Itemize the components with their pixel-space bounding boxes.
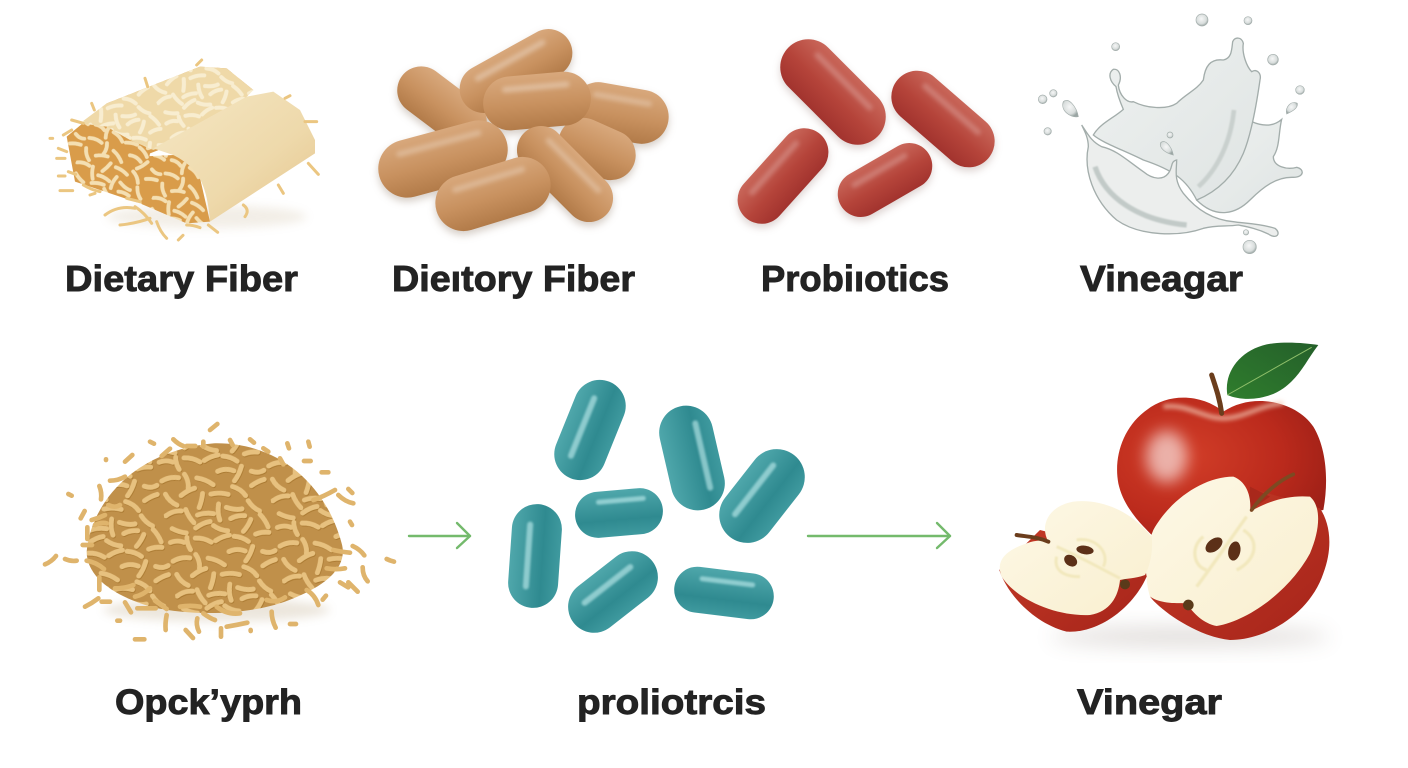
highlight — [1146, 431, 1187, 483]
label: Dieıtory Fiber — [392, 258, 635, 299]
back bar — [67, 67, 253, 203]
pile shadow — [103, 598, 330, 622]
whole apple — [1117, 375, 1326, 537]
seeds — [1203, 534, 1225, 556]
right lobe — [1197, 119, 1302, 213]
capsule — [550, 110, 644, 188]
shadow under bars — [107, 205, 307, 228]
seeds — [1076, 545, 1094, 555]
loose grains — [45, 424, 394, 639]
capsule — [428, 150, 558, 238]
right half apple — [1146, 474, 1329, 640]
back lobe — [1093, 38, 1260, 200]
apple shadow — [1050, 627, 1330, 647]
droplets — [1038, 14, 1304, 254]
inner shading — [1198, 110, 1234, 187]
mound — [87, 443, 343, 613]
label: Vinegar — [1077, 683, 1222, 722]
illustration: apples — [999, 343, 1330, 647]
capsule — [481, 69, 593, 133]
capsule — [708, 438, 816, 554]
stem — [1212, 375, 1222, 413]
arrow — [808, 523, 950, 548]
illustration: vinegar splash — [1038, 14, 1304, 254]
label: Dietary Fiber — [65, 258, 298, 299]
left half apple — [999, 501, 1152, 632]
label: Opck’yprh — [115, 683, 302, 722]
label: proliotrcis — [577, 683, 766, 722]
core — [1195, 517, 1254, 587]
loose shreds — [50, 60, 318, 240]
stem — [1017, 535, 1048, 542]
label: Vineagar — [1080, 258, 1243, 299]
capsule — [573, 486, 665, 540]
arrow — [409, 523, 470, 548]
capsule — [829, 135, 941, 225]
capsule — [451, 20, 581, 122]
illustration: tan capsules — [372, 20, 673, 238]
capsule — [558, 541, 668, 643]
front bar — [140, 92, 315, 223]
capsule — [881, 60, 1005, 178]
capsule — [388, 57, 496, 155]
illustration: teal capsules — [506, 372, 816, 643]
label: Probiıotics — [761, 258, 949, 299]
capsule — [654, 400, 730, 516]
capsule — [507, 116, 623, 232]
capsule — [567, 78, 673, 148]
front lobe — [1082, 125, 1278, 236]
dimple — [1163, 403, 1283, 418]
core — [1056, 540, 1120, 578]
capsule — [372, 114, 514, 204]
front shading — [1095, 167, 1187, 225]
capsule — [546, 372, 634, 488]
capsule — [506, 502, 564, 610]
capsule — [672, 564, 776, 622]
illustration: red capsules — [728, 28, 1005, 234]
illustration: fiber pile — [45, 424, 394, 639]
illustration: fiber bars — [50, 60, 318, 240]
capsule — [728, 118, 838, 234]
capsule — [769, 28, 897, 156]
stem — [1252, 474, 1293, 510]
leaf — [1227, 343, 1318, 399]
